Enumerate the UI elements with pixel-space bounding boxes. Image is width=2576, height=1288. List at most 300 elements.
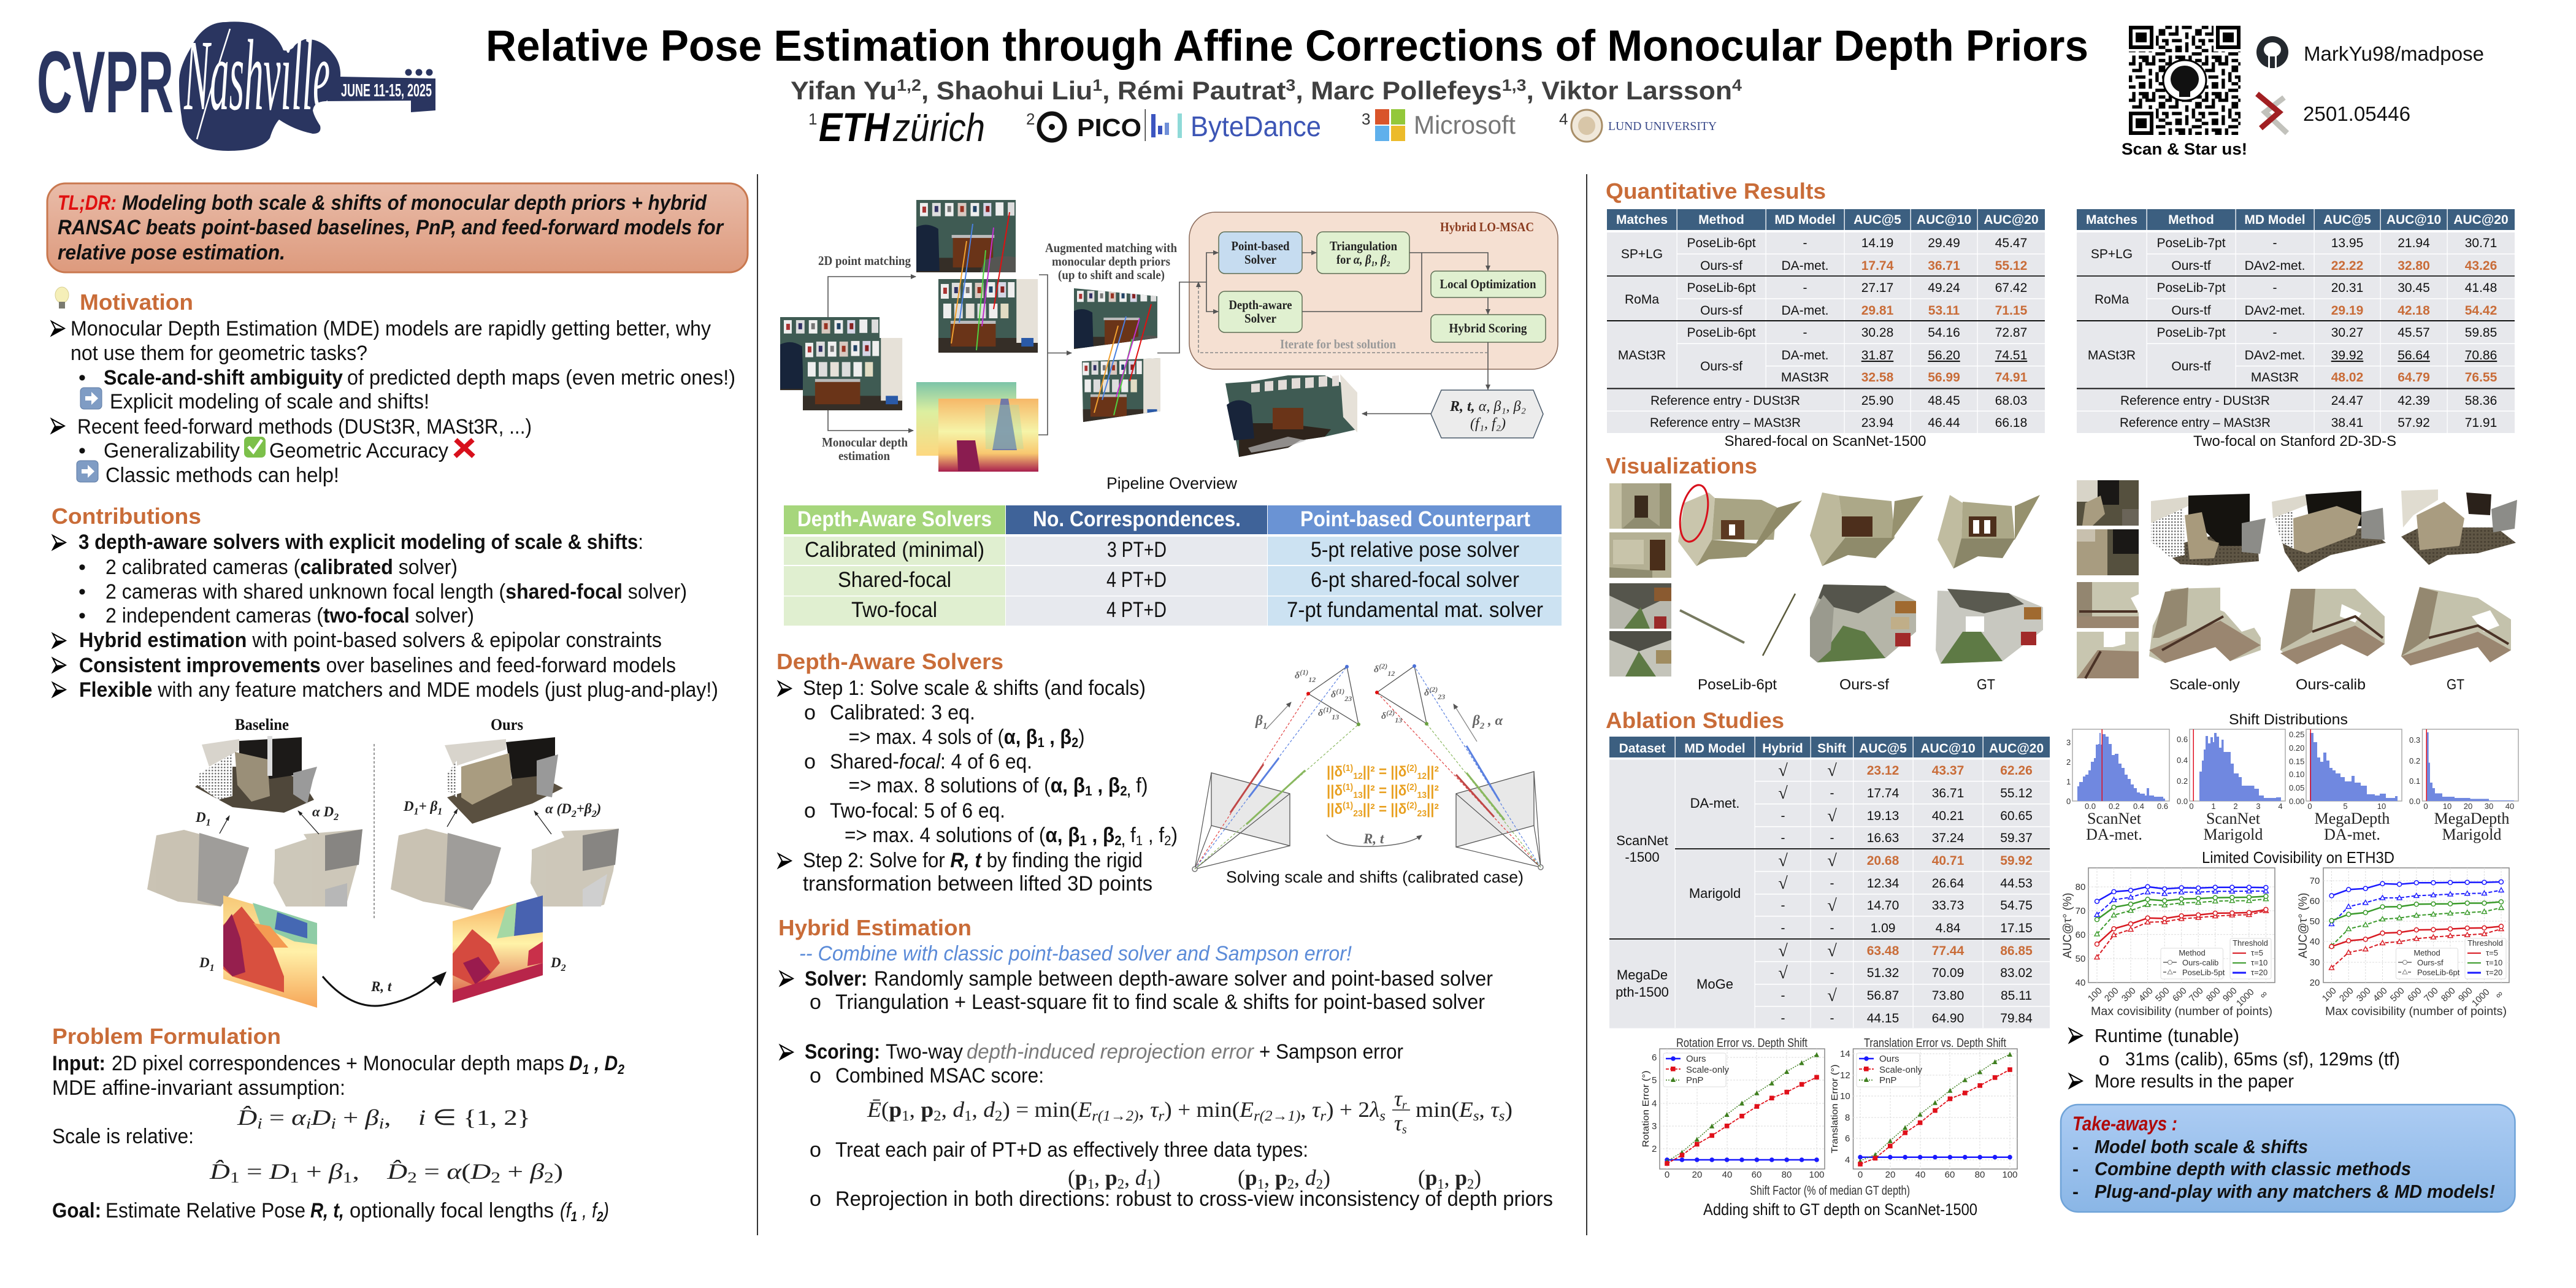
equation: affine depth: α: [291, 1105, 303, 1130]
table: two-focal on Stanford 2D-3D-S: 56.64: [2398, 348, 2430, 362]
text block: motivation: [52, 317, 735, 487]
panel: take-aways: Combine depth with classic methods: [2095, 1158, 2411, 1179]
heading: Problem Formulation: Problem Formulation: [52, 1024, 281, 1049]
chart: covisibility shared focal: 70: [2310, 876, 2320, 886]
ETH zurich: [808, 104, 985, 150]
equation: MSAC: ,: [941, 1097, 953, 1122]
figure: baseline vs ours point clouds: 2: [333, 812, 339, 822]
CVPR wordmark: CVPR: [37, 34, 174, 131]
warped matched images: [1074, 288, 1160, 422]
heading: Motivation: Motivation: [80, 289, 193, 315]
table: ablation: 60.65: [2000, 809, 2033, 823]
chart: translation error vs depth shift: 100: [2002, 1170, 2018, 1180]
table: ablation: √: [1778, 874, 1788, 893]
text block: depth-aware solver steps: transformation between lifted 3D points: [803, 872, 1152, 895]
sink thumbnails: [2077, 582, 2139, 678]
authors: , Marc Pollefeys: [1295, 76, 1502, 105]
chart: rotation error vs depth shift: 6: [1652, 1052, 1657, 1063]
equation: MSAC: r(2→1): [1254, 1108, 1300, 1124]
figure: baseline vs ours point clouds: 2: [561, 963, 566, 973]
table: shared-focal on ScanNet-1500: RoMa: [1625, 293, 1659, 307]
table: ablation: 17.74: [1867, 786, 1899, 800]
table: shared-focal on ScanNet-1500: 32.58: [1861, 370, 1894, 385]
chart: translation error vs depth shift: 0: [1858, 1170, 1863, 1180]
text block: problem formulation: 1: [583, 1062, 589, 1077]
icon: arrow: [77, 461, 98, 482]
data types: p: [1105, 1165, 1117, 1190]
equation: MSAC: r: [1320, 1108, 1327, 1124]
text block: hybrid estimation: Treat each pair of PT+D as effectively three data types:: [835, 1138, 1308, 1162]
table: shared-focal on ScanNet-1500: 72.87: [1995, 326, 2027, 340]
equation: MSAC: ) + 2: [1326, 1097, 1370, 1122]
table: ablation: 20.68: [1867, 854, 1899, 868]
text block: problem formulation: , f: [577, 1199, 599, 1222]
chart: covisibility calibrated: 60: [2076, 930, 2085, 940]
data types: ): [1474, 1165, 1481, 1190]
table: depth-aware solvers: Calibrated (minimal): [805, 538, 984, 562]
reconstructed scene: [1225, 374, 1357, 457]
text block: depth-aware solver steps: 2,: [1120, 783, 1130, 799]
table: ablation: √: [1827, 896, 1837, 915]
matching images: [916, 200, 1038, 353]
table: ablation: 16.63: [1867, 831, 1899, 845]
delta labels: (1): [1300, 668, 1308, 677]
table: depth-aware solvers: [784, 505, 1562, 626]
labels: Scale-only: [2169, 677, 2240, 693]
equation: MSAC: s: [1379, 1108, 1386, 1124]
table: ablation: √: [1827, 761, 1837, 780]
pipeline labels: Monocular depth: [822, 435, 908, 450]
panel: TL;DR: RANSAC beats point-based baselines, PnP, and feed-forward models for: [58, 216, 724, 239]
text block: depth-aware solver steps: Step 1: Solve scale & shifts (and focals): [803, 677, 1146, 700]
chart: histogram ScanNet DA-met: 2: [2066, 757, 2071, 767]
labels: GT: [1977, 677, 1995, 693]
text block: contributions: 3 depth-aware solvers with explicit modeling of scale & shifts:: [79, 531, 643, 554]
equation: relative scale: 1: [230, 1170, 240, 1186]
table: ablation: -: [1830, 921, 1834, 935]
table: two-focal on Stanford 2D-3D-S: -: [2273, 326, 2277, 340]
table: shared-focal on ScanNet-1500: SP+LG: [1621, 247, 1663, 261]
table: ablation: ScanNet: [1616, 833, 1668, 848]
equation: MSAC: r(1→2): [1092, 1108, 1138, 1124]
arrows: beta: 2: [1479, 721, 1485, 731]
table: ablation: 59.37: [2000, 831, 2033, 845]
arrows: beta: β: [1255, 713, 1263, 728]
chart: translation error vs depth shift: 20: [1885, 1170, 1895, 1180]
text block: motivation: Monocular Depth Estimation (MDE) models are rapidly getting better, why: [71, 317, 711, 340]
label: Baseline: Baseline: [235, 716, 289, 734]
table: two-focal on Stanford 2D-3D-S: 58.36: [2465, 394, 2497, 408]
chart: translation error vs depth shift: PnP: [1879, 1075, 1896, 1086]
equation: MSAC: 2: [933, 1108, 941, 1124]
PICO and ByteDance: PICO: [1077, 113, 1141, 142]
equation: MSAC: r: [1402, 1098, 1407, 1112]
panel: TL;DR: TL;DR:: [58, 191, 117, 215]
table: shared-focal on ScanNet-1500: 46.44: [1928, 416, 1960, 430]
icon: cross: [455, 440, 473, 456]
pipeline labels: monocular depth priors: [1052, 254, 1170, 269]
text block: runtime: 31ms (calib), 65ms (sf), 129ms (tf): [2125, 1048, 2400, 1070]
table: ablation: -: [1781, 899, 1785, 913]
figure: baseline vs ours point clouds: D: [199, 955, 210, 970]
data types: p: [1455, 1165, 1467, 1190]
table: ablation: √: [1778, 941, 1788, 960]
chart: histogram MegaDepth DA-met: 0.15: [2289, 757, 2304, 766]
figure: baseline vs ours point clouds: α D: [312, 804, 334, 819]
chart: covisibility calibrated: ∞: [2258, 989, 2270, 1001]
Nashville script: [183, 19, 330, 139]
orange constraints: ||²: [1427, 783, 1439, 799]
depth labels: D: [196, 810, 206, 825]
labels: Ours-sf: [1839, 677, 1889, 693]
equation: affine depth: i: [257, 1116, 263, 1132]
figure: baseline vs ours point clouds: ): [596, 801, 601, 816]
data types: ,: [1094, 1165, 1105, 1190]
chart: covisibility calibrated: Max covisibility (number of points): [2091, 1005, 2272, 1018]
table: shared-focal on ScanNet-1500: Reference entry - DUSt3R: [1650, 394, 1800, 408]
scene: Ours-calib sofa: [2272, 491, 2386, 572]
table: ablation: 40.21: [1932, 809, 1964, 823]
table: ablation: √: [1827, 941, 1837, 960]
chart: rotation error vs depth shift: 60: [1752, 1170, 1761, 1180]
column divider right: [1586, 174, 1587, 1235]
arrow: R, t: [323, 972, 447, 1006]
table: two-focal on Stanford 2D-3D-S: 20.31: [2331, 281, 2363, 295]
table: ablation: √: [1827, 986, 1837, 1005]
figure: baseline vs ours point clouds: 1: [437, 807, 442, 817]
chart: histogram ScanNet Marigold: 0.0: [2177, 797, 2188, 806]
table: two-focal on Stanford 2D-3D-S: MD Model: [2244, 213, 2306, 227]
equation: affine depth: D̂: [237, 1105, 253, 1130]
arxiv link: [2257, 94, 2410, 133]
chart: translation error vs depth shift: 8: [1845, 1113, 1850, 1123]
table: depth-aware solvers: Two-focal: [851, 598, 937, 622]
table: ablation: 77.44: [1932, 944, 1965, 958]
text block: contributions: •: [79, 556, 86, 579]
data types: p: [1275, 1165, 1287, 1190]
table: shared-focal on ScanNet-1500: Reference entry – MASt3R: [1650, 416, 1801, 430]
panel: Hybrid LO-MSAC: Iterate for best solution: [1280, 337, 1396, 351]
table: shared-focal on ScanNet-1500: DA-met.: [1781, 304, 1829, 318]
text block: hybrid estimation: Reprojection in both directions: robust to cross-view inconsistency of depth priors: [835, 1187, 1553, 1211]
equation: relative scale: ,: [352, 1159, 387, 1184]
panel: take-aways: -: [2072, 1182, 2079, 1202]
equation: MSAC: τ: [1312, 1097, 1321, 1122]
equation: MSAC: r: [1159, 1108, 1165, 1124]
text block: hybrid estimation: Solver:: [805, 967, 867, 991]
table: two-focal on Stanford 2D-3D-S: 43.26: [2465, 259, 2497, 273]
table: shared-focal on ScanNet-1500: Method: [1698, 213, 1744, 227]
table: two-focal on Stanford 2D-3D-S: Method: [2168, 213, 2214, 227]
text block: depth-aware solver steps: [778, 677, 1178, 895]
table: ablation: 14.70: [1867, 899, 1899, 913]
icon: github: [2256, 36, 2288, 68]
table: shared-focal on ScanNet-1500: 53.11: [1928, 304, 1960, 318]
text block: motivation: Scale-and-shift ambiguity: [104, 366, 343, 389]
table: ablation: -: [1781, 989, 1785, 1003]
delta labels: 12: [1387, 669, 1395, 678]
table: depth-aware solvers: 6-pt shared-focal solver: [1311, 568, 1519, 592]
chart: histogram MegaDepth Marigold: 10: [2443, 802, 2451, 811]
pipeline labels: Augmented matching with: [1045, 240, 1177, 255]
panel: TL;DR: [47, 183, 748, 272]
text block: depth-aware solver steps: , β: [1087, 824, 1114, 847]
chart: covisibility calibrated: [2061, 868, 2275, 1018]
pipeline arrows: [828, 253, 1488, 435]
equation: relative scale: 2: [544, 1170, 554, 1186]
orange constraints: 23: [1417, 808, 1427, 819]
chart: covisibility shared focal: 900: [2456, 986, 2475, 1004]
chart: covisibility shared focal: 60: [2310, 896, 2320, 907]
QR code: [2129, 26, 2241, 135]
logo: CVPR Nashville: Nashville: [183, 19, 330, 131]
table: shared-focal on ScanNet-1500: 27.17: [1861, 281, 1893, 295]
icon: arxiv: [2257, 94, 2287, 133]
table: shared-focal on ScanNet-1500: 71.15: [1995, 304, 2028, 318]
table: two-focal on Stanford 2D-3D-S: AUC@5: [2323, 213, 2371, 227]
equation: relative scale: =: [240, 1159, 269, 1184]
chart: rotation error vs depth shift: 0: [1665, 1170, 1669, 1180]
table: ablation: -: [1781, 831, 1785, 845]
scene: GT hallway: [1938, 495, 2040, 569]
equation: MSAC: Ē(p: [867, 1097, 901, 1122]
table: ablation: 79.84: [2000, 1011, 2033, 1025]
baseline view 2: [274, 829, 362, 907]
table: shared-focal on ScanNet-1500: DA-met.: [1781, 348, 1829, 362]
input image stack: [780, 317, 902, 410]
ours view 2: [531, 829, 619, 907]
table: two-focal on Stanford 2D-3D-S: 38.41: [2331, 416, 2363, 430]
equation: MSAC: τ: [1150, 1097, 1159, 1122]
box: point-based solver: Solver: [1244, 252, 1276, 267]
chart: covisibility shared focal: 300: [2355, 986, 2373, 1004]
table: depth-aware solvers: 3 PT+D: [1107, 538, 1167, 562]
chart: covisibility calibrated: 100: [2086, 986, 2104, 1004]
table: two-focal on Stanford 2D-3D-S: 42.18: [2398, 304, 2430, 318]
chart: rotation error vs depth shift: Scale-only: [1686, 1065, 1730, 1075]
table: two-focal on Stanford 2D-3D-S: 39.92: [2331, 348, 2363, 362]
text block: motivation: •: [79, 366, 86, 389]
table: two-focal on Stanford 2D-3D-S: Matches: [2086, 213, 2137, 227]
table: two-focal on Stanford 2D-3D-S: 48.02: [2331, 370, 2363, 385]
box: triangulation: [1317, 232, 1409, 274]
table: two-focal on Stanford 2D-3D-S: 21.94: [2398, 236, 2430, 250]
text block: depth-aware solver steps: Calibrated: 3 eq.: [830, 701, 975, 724]
chart: covisibility calibrated: AUC@τ° (%): [2061, 893, 2074, 958]
table: two-focal on Stanford 2D-3D-S: 32.80: [2398, 259, 2430, 273]
scene: GT sink: [2401, 587, 2511, 665]
heading: Hybrid Estimation: Hybrid Estimation: [778, 915, 972, 940]
orange constraints: ||δ: [1327, 801, 1344, 818]
table: ablation: √: [1778, 784, 1788, 803]
equation: relative scale: 2: [407, 1170, 417, 1186]
figure: baseline vs ours point clouds: +β: [577, 801, 592, 816]
equation: relative scale: D: [269, 1159, 285, 1184]
PICO and ByteDance: [1026, 109, 1321, 142]
chart: histogram MegaDepth DA-met: 5: [2343, 802, 2348, 811]
equation: relative scale: 1: [289, 1170, 299, 1186]
chart: covisibility calibrated: 70: [2076, 906, 2085, 916]
chart: histogram ScanNet Marigold: 3: [2256, 802, 2261, 811]
arrows: [220, 809, 551, 834]
output hexagon: R, t, α, β₁, β₂: [1449, 399, 1526, 415]
table: shared-focal on ScanNet-1500: 56.99: [1928, 370, 1960, 385]
table: ablation: √: [1778, 851, 1788, 870]
table: two-focal on Stanford 2D-3D-S: RoMa: [2095, 293, 2129, 307]
equation: affine depth: ,: [384, 1105, 418, 1130]
text block: problem formulation: MDE affine-invariant assumption:: [52, 1076, 345, 1100]
table: ablation: 33.73: [1932, 899, 1964, 913]
chart: rotation error vs depth shift: 100: [1809, 1170, 1825, 1180]
chart: histogram MegaDepth DA-met: MegaDepth: [2315, 810, 2390, 827]
chart: histogram ScanNet Marigold: 2: [2233, 802, 2238, 811]
chart: covisibility calibrated: 800: [2204, 986, 2223, 1004]
table: two-focal on Stanford 2D-3D-S: 13.95: [2331, 236, 2363, 250]
text block: depth-aware solver steps: 2: [1071, 735, 1078, 750]
table: depth-aware solvers: 4 PT+D: [1106, 598, 1167, 622]
equation: MSAC: 1: [964, 1108, 972, 1124]
table: shared-focal on ScanNet-1500: 36.71: [1928, 259, 1960, 273]
scene: Ours-sf hallway: [1810, 493, 1923, 566]
equation: affine depth: +: [336, 1105, 365, 1130]
chart: histogram ScanNet DA-met: 1: [2066, 777, 2071, 786]
output hexagon: [1431, 390, 1543, 438]
chart: translation error vs depth shift: [1830, 1037, 2018, 1180]
orange constraints: (1): [1343, 763, 1353, 773]
table: depth-aware solvers: 5-pt relative pose solver: [1311, 538, 1519, 562]
chart: rotation error vs depth shift: Rotation Error vs. Depth Shift: [1676, 1037, 1807, 1050]
delta labels: 13: [1395, 716, 1402, 724]
scene: PoseLib-6pt hallway: [1678, 493, 1802, 566]
sofa thumbnails: [2077, 480, 2139, 575]
panel: Hybrid LO-MSAC: Hybrid LO-MSAC: [1440, 220, 1534, 234]
chart: histogram MegaDepth Marigold: 0.2: [2409, 756, 2420, 765]
table: ablation: Marigold: [1689, 886, 1741, 901]
chart: histogram ScanNet DA-met: 0.2: [2109, 802, 2120, 811]
equation: relative scale: =: [417, 1159, 447, 1184]
baseline view 1: [147, 830, 249, 907]
data types: (p: [1238, 1165, 1257, 1190]
delta labels: (2): [1379, 662, 1387, 670]
equation: affine depth: β: [365, 1105, 376, 1130]
table: two-focal on Stanford 2D-3D-S: DAv2-met.: [2245, 304, 2305, 318]
orange constraints: ||² = ||δ: [1363, 783, 1406, 799]
chart: rotation error vs depth shift: 4: [1652, 1098, 1657, 1109]
table: shared-focal on ScanNet-1500: 74.91: [1995, 370, 2028, 385]
equation: MSAC: τ: [1394, 1086, 1402, 1111]
equation: relative scale: β: [329, 1159, 340, 1184]
orange constraints: ||² = ||δ: [1363, 801, 1406, 818]
text block: motivation: Explicit modeling of scale and shifts!: [110, 390, 429, 413]
chart: histogram MegaDepth Marigold: 40: [2505, 802, 2514, 811]
authors: 1,3: [1502, 76, 1527, 94]
data types: 2: [1287, 1176, 1294, 1192]
date: JUNE 11-15, 2025: [341, 81, 432, 101]
baseline merged scene: [195, 736, 317, 813]
table: shared-focal on ScanNet-1500: -: [1803, 236, 1807, 250]
ours merged scene: [445, 737, 563, 824]
table: ablation: √: [1778, 964, 1788, 983]
equation: MSAC: ,: [1138, 1097, 1150, 1122]
depth labels: 1: [206, 818, 211, 828]
orange constraints: ||δ: [1327, 764, 1344, 780]
chart: covisibility calibrated: τ=5: [2251, 948, 2263, 957]
text block: problem formulation: 1: [571, 1209, 577, 1224]
table: two-focal on Stanford 2D-3D-S: PoseLib-7pt: [2156, 281, 2226, 295]
chart: histogram MegaDepth Marigold: 30: [2485, 802, 2493, 811]
Microsoft: Microsoft: [1414, 110, 1516, 139]
ETH zurich: ETH: [819, 104, 890, 150]
text block: hybrid estimation: o: [810, 1064, 821, 1087]
text block: contributions: Flexible with any feature matchers and MDE models (just plug-and-play!): [79, 678, 718, 702]
chart: covisibility shared focal: 100: [2320, 986, 2339, 1004]
heading: Depth-Aware Solvers: Depth-Aware Solvers: [776, 649, 1003, 674]
data types: 2: [1316, 1176, 1323, 1192]
chart: rotation error vs depth shift: 2: [1652, 1144, 1657, 1154]
text block: contributions: Hybrid estimation with point-based solvers & epipolar constraints: [79, 629, 662, 652]
highlight ellipse: [1676, 483, 1712, 544]
table: ablation: 64.90: [1932, 1011, 1964, 1025]
data types: ,: [1294, 1165, 1305, 1190]
chart: covisibility shared focal: 800: [2439, 986, 2458, 1004]
table: two-focal on Stanford 2D-3D-S: MASt3R: [2251, 370, 2299, 385]
chart: covisibility calibrated: 500: [2153, 986, 2172, 1004]
table: two-focal on Stanford 2D-3D-S: 64.79: [2398, 370, 2430, 385]
table: ablation: AUC@20: [1989, 742, 2044, 756]
table: shared-focal on ScanNet-1500: Ours-sf: [1700, 304, 1742, 318]
chart: histogram MegaDepth DA-met: 0.25: [2289, 730, 2304, 739]
table: ablation: Hybrid: [1762, 742, 1803, 756]
chart: histogram MegaDepth DA-met: 0.05: [2289, 783, 2304, 792]
text block: motivation: •: [79, 439, 86, 462]
table: ablation: 44.53: [2000, 876, 2033, 891]
table: two-focal on Stanford 2D-3D-S: 30.27: [2331, 326, 2363, 340]
data types: (p: [1068, 1165, 1087, 1190]
chart: histogram ScanNet Marigold: 4: [2278, 802, 2283, 811]
title: Relative Pose Estimation through Affine Corrections of Monocular Depth Priors: [486, 22, 2088, 71]
table: ablation: 1.09: [1871, 921, 1895, 935]
table: shared-focal on ScanNet-1500: 67.42: [1995, 281, 2027, 295]
table: shared-focal on ScanNet-1500: 30.28: [1861, 326, 1893, 340]
equation: MSAC: 1: [902, 1108, 910, 1124]
orange constraints: ||δ: [1327, 783, 1344, 799]
text block: motivation: of predicted depth maps (even metric ones!): [347, 366, 735, 389]
table: ablation: Dataset: [1619, 742, 1665, 756]
table: ablation: 26.64: [1932, 876, 1965, 891]
chart: histogram MegaDepth DA-met: 10: [2377, 802, 2386, 811]
table: ablation: 51.32: [1867, 966, 1899, 980]
scene: GT corridor: [1936, 589, 2043, 664]
figure: baseline vs ours point clouds: + β: [419, 799, 437, 814]
panel: take-aways: Take-aways :: [2072, 1113, 2177, 1135]
equation: MSAC: d: [953, 1097, 965, 1122]
chart: translation error vs depth shift: Ours: [1879, 1054, 1899, 1064]
table: shared-focal on ScanNet-1500: 56.20: [1928, 348, 1960, 362]
chart: covisibility calibrated: 200: [2103, 986, 2121, 1004]
chart: covisibility calibrated: PoseLib-5pt: [2182, 968, 2225, 977]
orange constraints: ||²: [1427, 801, 1439, 818]
text block: contributions: •: [79, 580, 86, 604]
table: two-focal on Stanford 2D-3D-S: 24.47: [2331, 394, 2363, 408]
equation: MSAC: ,: [910, 1097, 921, 1122]
pipeline labels: estimation: [838, 448, 890, 463]
chart: histogram MegaDepth DA-met: 0.10: [2289, 770, 2304, 779]
chart: covisibility shared focal: 400: [2371, 986, 2390, 1004]
text block: depth-aware solver steps: f: [1125, 824, 1136, 847]
left camera frustum: [1192, 665, 1360, 872]
table: shared-focal on ScanNet-1500: Ours-sf: [1700, 259, 1742, 273]
panel: take-aways: -: [2072, 1159, 2079, 1179]
